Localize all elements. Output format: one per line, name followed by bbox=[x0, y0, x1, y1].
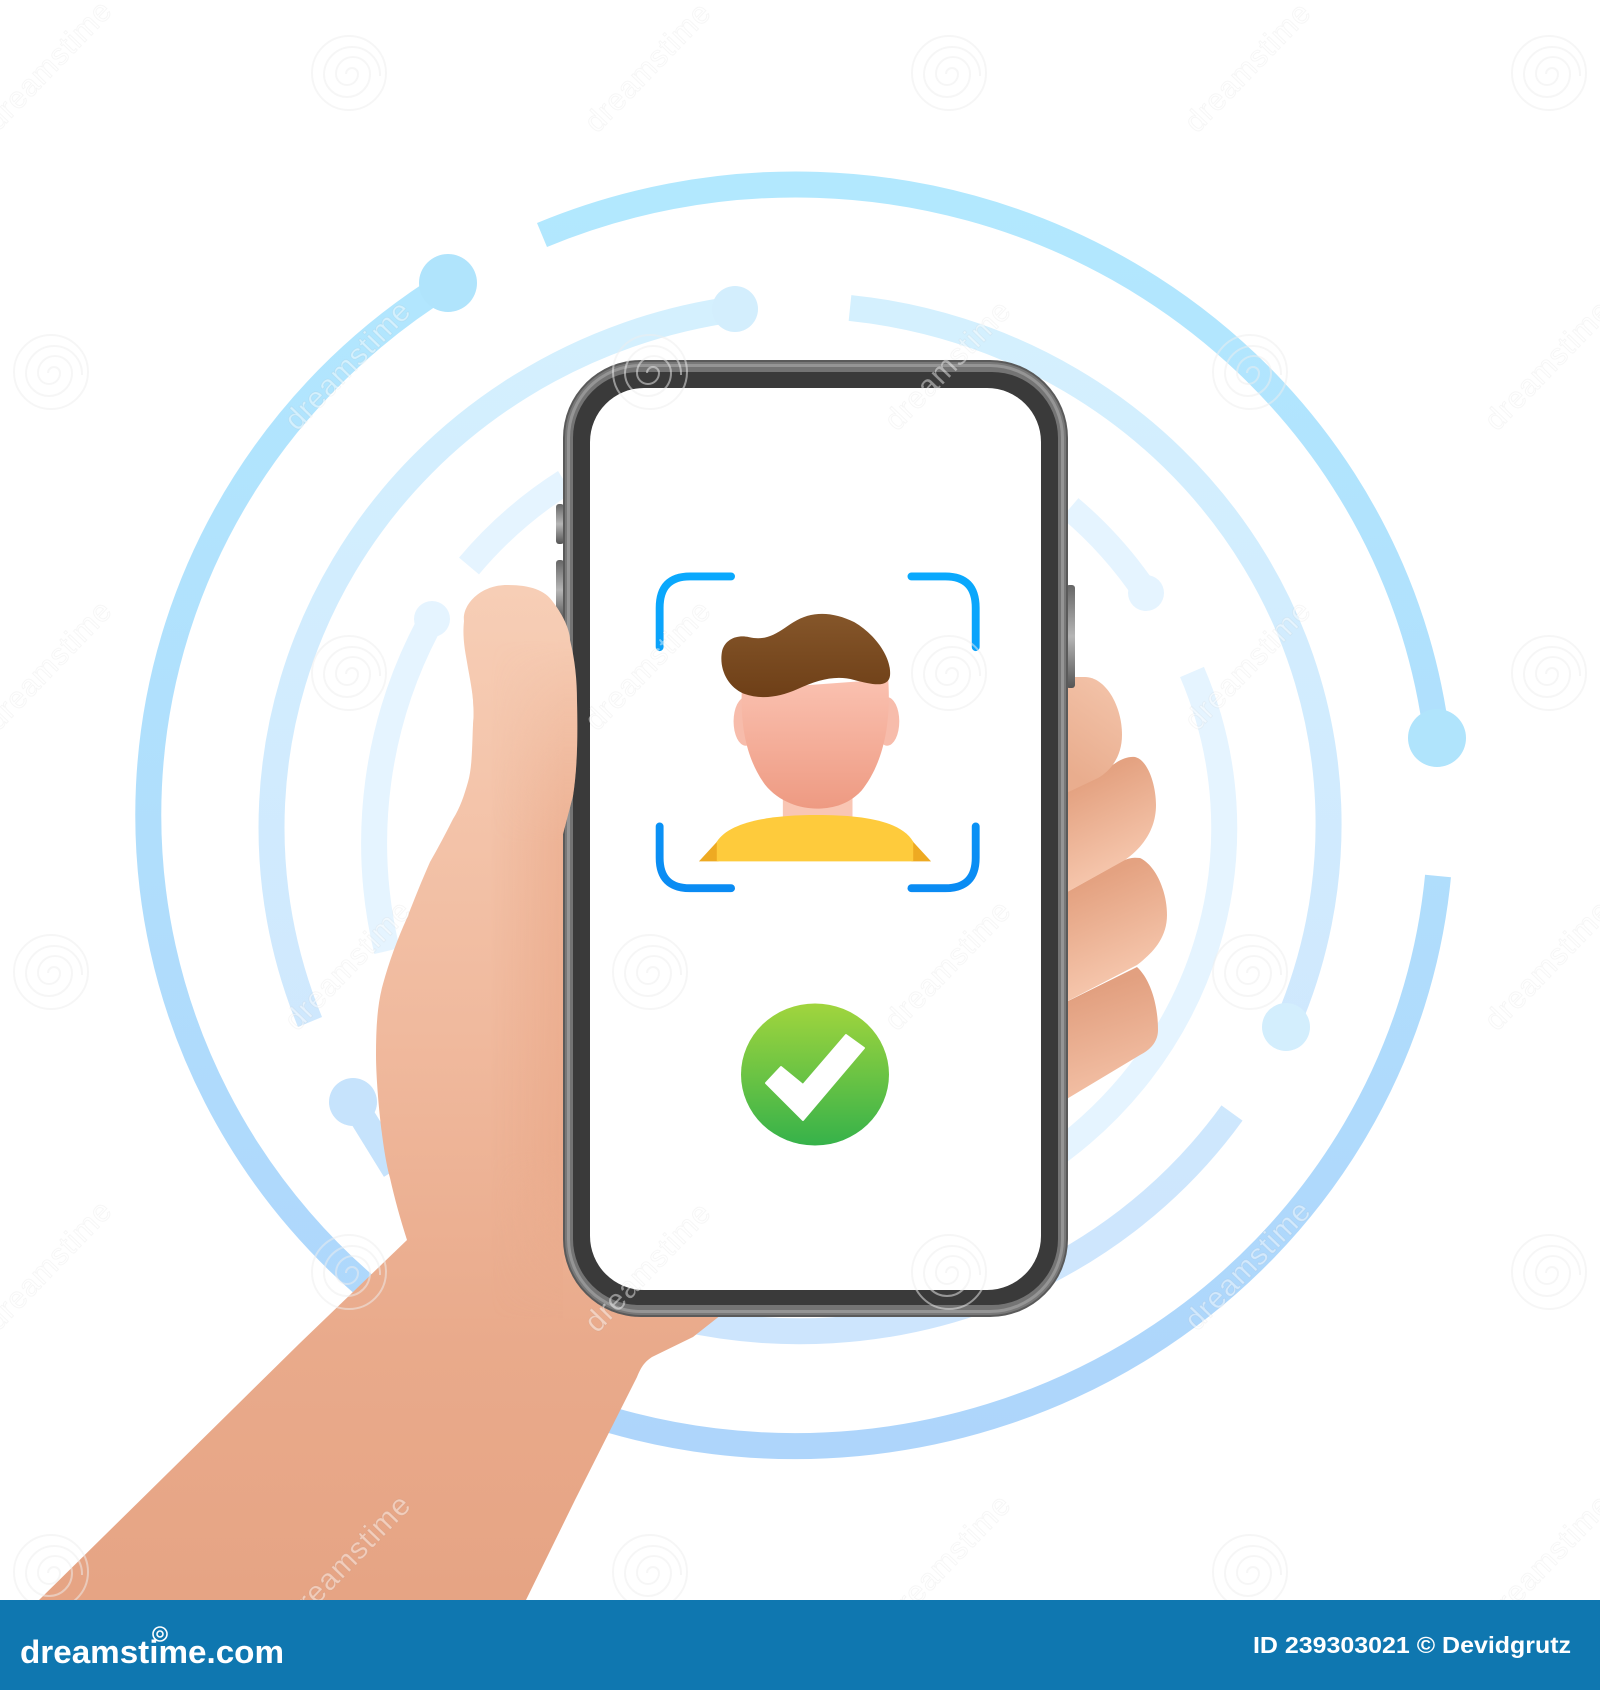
finger 2 bbox=[1060, 757, 1156, 896]
hair bbox=[721, 614, 890, 697]
phone frame bbox=[563, 360, 1068, 1317]
hand: fingers behind phone bbox=[1060, 677, 1167, 1103]
watermark text: dreamstime bbox=[878, 1488, 1018, 1631]
verified badge bbox=[741, 1004, 889, 1146]
watermark text: dreamstime bbox=[578, 0, 718, 139]
hand: palm and arm bbox=[39, 621, 740, 1600]
hand: thumb over phone bbox=[464, 585, 578, 1172]
scan brackets bbox=[660, 576, 976, 888]
finger 1 bbox=[1060, 677, 1122, 796]
watermark text: dreamstime bbox=[1178, 0, 1318, 139]
footer logo spiral bbox=[153, 1627, 167, 1641]
side buttons bbox=[556, 504, 1075, 688]
watermark text: dreamstime bbox=[278, 1488, 418, 1631]
middle ring arcs bbox=[272, 308, 1329, 1331]
neck bbox=[783, 790, 852, 820]
concentric ring decoration bbox=[148, 184, 1466, 1446]
watermark text: dreamstime bbox=[278, 294, 418, 437]
footer logo text: dreamstime.com bbox=[20, 1634, 284, 1670]
inner ring node dots bbox=[414, 575, 1164, 637]
shirt bbox=[717, 815, 913, 861]
finger 4 bbox=[1060, 967, 1158, 1103]
face scan illustration bbox=[660, 576, 976, 888]
image id and author: ID 239303021 © Devidgrutz bbox=[1253, 1632, 1571, 1658]
badge circle bbox=[741, 1004, 889, 1146]
watermark text: dreamstime bbox=[278, 894, 418, 1037]
person avatar bbox=[699, 614, 931, 861]
watermark text: dreamstime bbox=[1178, 594, 1318, 737]
smartphone bbox=[556, 360, 1075, 1317]
outer ring arcs bbox=[148, 184, 1438, 1446]
watermark text: dreamstime bbox=[878, 894, 1018, 1037]
watermark text: dreamstime bbox=[578, 1196, 718, 1339]
finger 3 bbox=[1060, 858, 1167, 1005]
face bbox=[742, 679, 889, 809]
check mark bbox=[766, 1035, 864, 1120]
shirt sides bbox=[699, 840, 931, 861]
middle ring node dots bbox=[712, 286, 1310, 1051]
ears bbox=[734, 697, 899, 746]
watermark text: dreamstime bbox=[878, 294, 1018, 437]
phone screen bbox=[590, 388, 1041, 1290]
watermark text: dreamstime bbox=[578, 594, 718, 737]
inner ring arcs bbox=[374, 482, 1224, 1165]
outer ring node dots bbox=[419, 254, 1466, 767]
lower left node and connector bbox=[329, 1078, 395, 1170]
footer background bbox=[0, 1600, 1600, 1690]
watermark text: dreamstime bbox=[1178, 1194, 1318, 1337]
footer bar bbox=[0, 1600, 1600, 1690]
